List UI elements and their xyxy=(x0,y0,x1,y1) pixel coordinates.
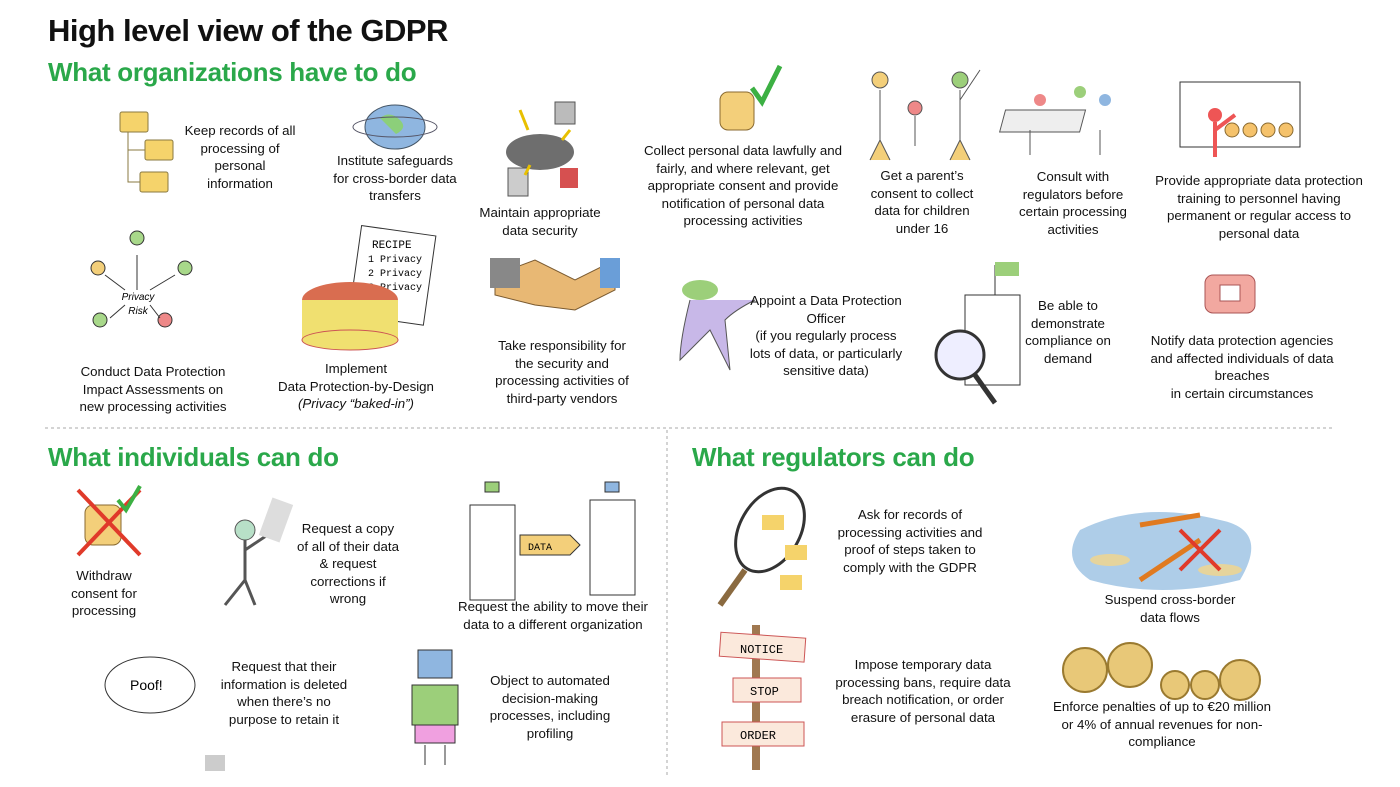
text: delete: when there’s no xyxy=(237,694,331,709)
icon: meeting xyxy=(1000,86,1111,155)
text: training: personal data xyxy=(1219,226,1299,240)
text: security: Maintain appropriate xyxy=(479,205,601,220)
text: ask records: processing activities and xyxy=(838,524,982,540)
text: suspend xyxy=(1105,592,1236,624)
icon: folders xyxy=(120,112,173,192)
icon: magnifier folders xyxy=(720,476,818,605)
icon: signpost xyxy=(719,625,806,770)
icon: thumbs up xyxy=(720,66,780,130)
text: DPO: Officer xyxy=(807,310,845,326)
text: delete xyxy=(221,659,347,726)
icon: DPO xyxy=(680,280,755,370)
icon: recipe cake xyxy=(302,226,436,350)
icon: signpost: ORDER xyxy=(740,729,776,743)
text: withdraw: Withdraw xyxy=(76,568,132,583)
icon: withdraw thumb xyxy=(78,486,140,555)
icon: coins xyxy=(1063,643,1260,700)
text: by design: Data Protection-by-Design xyxy=(278,378,434,394)
text: notify xyxy=(1150,333,1334,400)
icon: signpost: NOTICE xyxy=(740,643,783,657)
text: impose: breach notification, or order xyxy=(842,692,1004,707)
text: object: processes, including xyxy=(490,708,610,723)
text: parent: consent to collect xyxy=(871,186,973,200)
text: demonstrate: compliance on xyxy=(1025,333,1111,348)
icon: phone xyxy=(1205,275,1255,313)
icon: islands xyxy=(1072,512,1251,590)
text: consult xyxy=(1019,169,1127,236)
icon: recipe cake: 2 Privacy xyxy=(368,268,422,280)
text: records: information xyxy=(207,176,273,190)
icon: robot xyxy=(412,650,458,765)
text: DPIA: new processing activities xyxy=(79,399,227,414)
heading: regulators: What regulators can do xyxy=(692,442,974,472)
icon: compliance magnifier xyxy=(936,262,1020,403)
icon: recipe cake: 1 Privacy xyxy=(368,254,422,266)
text: consult: certain processing xyxy=(1019,204,1127,219)
text: safeguards: Institute safeguards xyxy=(337,153,453,168)
text: vendors: third-party vendors xyxy=(507,390,617,406)
text: DPO: (if you regularly process xyxy=(755,328,897,343)
text: impose: Impose temporary data xyxy=(855,657,991,672)
text: withdraw: processing xyxy=(72,603,136,618)
text: notify: and affected individuals of data xyxy=(1150,350,1334,366)
text: object: decision-making xyxy=(502,690,598,706)
text: by design: (Privacy “baked-in”) xyxy=(298,396,414,411)
icon: signpost: STOP xyxy=(750,685,779,699)
text: consult: regulators before xyxy=(1023,186,1123,202)
text: penalties: Enforce penalties of up to €20 million xyxy=(1053,699,1271,714)
text: by design: Implement xyxy=(325,361,387,376)
icon: poof cloud: Poof! xyxy=(130,677,163,693)
text: vendors xyxy=(495,338,629,406)
text: collect: notification of personal data xyxy=(662,196,824,210)
icon: globe xyxy=(353,105,437,149)
text: safeguards xyxy=(333,153,457,203)
text: delete: information is deleted xyxy=(221,676,347,692)
text: ask records: proof of steps taken to xyxy=(844,542,976,557)
text: security xyxy=(479,205,601,238)
text: notify: in certain circumstances xyxy=(1171,386,1313,400)
text: collect: appropriate consent and provide xyxy=(648,178,838,193)
text: penalties: or 4% of annual revenues for non- xyxy=(1061,716,1263,732)
text: DPIA xyxy=(79,364,227,414)
text: records: processing of xyxy=(200,140,280,156)
text: copy: Request a copy xyxy=(302,521,394,536)
text: object: Object to automated xyxy=(490,673,610,688)
text: training xyxy=(1155,173,1363,240)
text: DPO: sensitive data) xyxy=(783,363,869,378)
text: withdraw xyxy=(71,568,137,618)
icon: handshake xyxy=(490,258,620,310)
text: security: data security xyxy=(502,222,578,238)
text: portability xyxy=(458,599,648,632)
text: collect: fairly, and where relevant, get xyxy=(656,160,830,176)
icon: person papers xyxy=(225,497,293,605)
icon: recipe cake: RECIPE xyxy=(372,240,412,252)
icons layer: Risk xyxy=(128,306,149,317)
text: DPO: lots of data, or particularly xyxy=(750,346,902,360)
text: portability: data to a different organization xyxy=(463,616,643,632)
text: DPIA: Conduct Data Protection xyxy=(81,364,225,379)
text: demonstrate: Be able to xyxy=(1038,298,1098,313)
text: suspend: Suspend cross-border xyxy=(1105,592,1235,607)
text: suspend: data flows xyxy=(1140,610,1200,624)
text: DPO xyxy=(750,293,902,378)
text: notify: breaches xyxy=(1215,368,1269,383)
text: withdraw: consent for xyxy=(71,586,137,600)
heading: organizations: What organizations have to do xyxy=(48,57,416,87)
text: object xyxy=(490,673,610,740)
text: DPIA: Impact Assessments on xyxy=(83,382,223,396)
text: vendors: Take responsibility for xyxy=(498,338,626,353)
text: collect: Collect personal data lawfully and xyxy=(644,143,842,158)
text: copy: wrong xyxy=(330,591,366,606)
text: vendors: processing activities of xyxy=(495,373,629,388)
text: collect xyxy=(644,143,842,228)
text: consult: Consult with xyxy=(1037,169,1109,184)
icon: recipe cake: 3 Privacy xyxy=(368,282,422,294)
text: by design xyxy=(278,361,434,411)
text: training: training to personnel having xyxy=(1177,190,1341,206)
text: parent: under 16 xyxy=(896,220,948,236)
text: vendors: the security and xyxy=(515,356,609,370)
text: delete: Request that their xyxy=(232,659,336,674)
text: copy: of all of their data xyxy=(297,538,399,554)
text: demonstrate xyxy=(1025,298,1111,366)
text: DPO: Appoint a Data Protection xyxy=(750,293,902,308)
text: consult: activities xyxy=(1048,222,1098,236)
text: demonstrate: demonstrate xyxy=(1031,316,1105,330)
text: parent: data for children xyxy=(874,203,970,218)
heading: individuals: What individuals can do xyxy=(48,442,339,472)
text: object: profiling xyxy=(527,726,573,740)
icons layer: Privacy xyxy=(122,292,155,303)
text: records: personal xyxy=(214,158,266,173)
text: records: Keep records of all xyxy=(185,123,295,138)
text: delete: purpose to retain it xyxy=(229,712,339,726)
icon: security cloud xyxy=(506,102,578,196)
text: collect: processing activities xyxy=(684,213,802,228)
text: impose: processing bans, require data xyxy=(835,674,1011,690)
icon: family xyxy=(870,70,980,160)
text: penalties: compliance xyxy=(1128,734,1196,749)
text: ask records: comply with the GDPR xyxy=(843,560,977,574)
icon: training xyxy=(1180,82,1300,157)
icons layer: DATA xyxy=(528,543,552,554)
text: copy: corrections if xyxy=(310,574,386,588)
icon: poof cloud xyxy=(105,657,225,771)
text: copy: & request xyxy=(320,556,376,571)
text: impose: erasure of personal data xyxy=(851,710,995,724)
text: penalties xyxy=(1053,699,1271,749)
icon: buildings data xyxy=(470,482,635,600)
text: demonstrate: demand xyxy=(1044,350,1092,366)
icon: privacy risk people xyxy=(91,231,192,327)
text: parent: Get a parent’s xyxy=(880,168,964,183)
title: High level view of the GDPR xyxy=(48,13,448,48)
text: ask records xyxy=(838,507,982,574)
text: training: permanent or regular access to xyxy=(1167,208,1351,223)
text: safeguards: transfers xyxy=(369,188,421,203)
text: parent xyxy=(871,168,974,236)
text: training: Provide appropriate data protection xyxy=(1155,173,1363,188)
text: notify: Notify data protection agencies xyxy=(1151,333,1333,348)
text: impose xyxy=(835,657,1011,724)
text: safeguards: for cross-border data xyxy=(333,170,457,186)
text: copy xyxy=(297,521,400,606)
text: ask records: Ask for records of xyxy=(858,507,962,522)
text: records xyxy=(185,123,295,190)
text: portability: Request the ability to move their xyxy=(458,599,648,614)
